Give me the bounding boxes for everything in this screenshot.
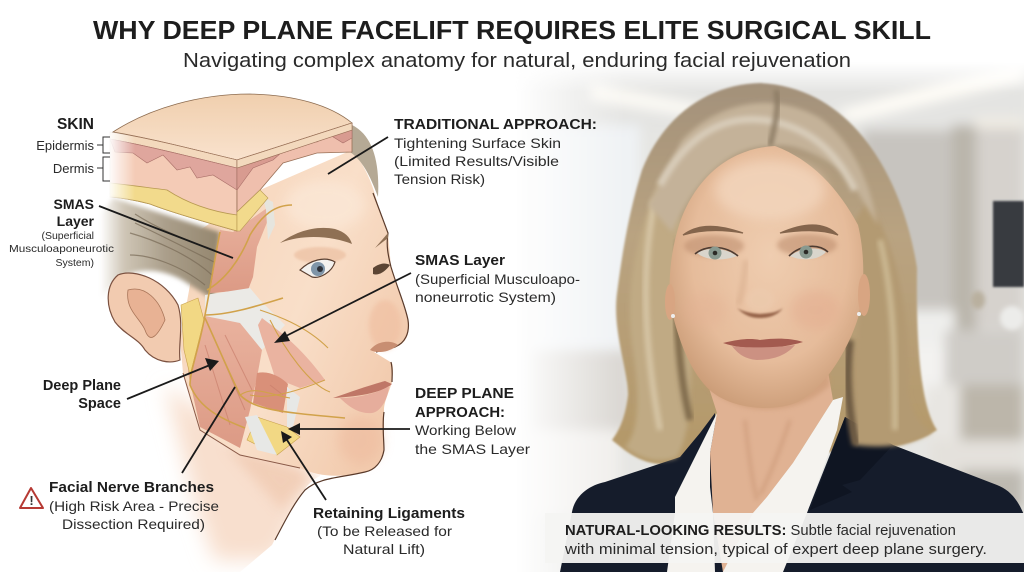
arrow: facial nerve branches <box>182 387 235 473</box>
label: deep plane space: Deep Plane <box>43 378 121 394</box>
cheek warmth <box>790 290 840 330</box>
skin cross-section flap <box>110 94 352 231</box>
label: facial nerve branches: (High Risk Area - Precise <box>49 498 219 514</box>
warning icon <box>20 488 43 508</box>
neck <box>165 385 320 560</box>
arrow: deep plane approach <box>288 423 410 435</box>
label: deep plane approach: APPROACH: <box>415 405 505 421</box>
label: deep plane space: Space <box>78 396 121 412</box>
label: SMAS layer left: System) <box>55 257 94 269</box>
label: deep plane approach: DEEP PLANE <box>415 386 514 402</box>
label: SMAS layer left: (Superficial <box>41 230 94 242</box>
caption banner <box>545 513 1024 563</box>
face skin <box>180 150 409 476</box>
white shirt <box>667 397 843 572</box>
label: skin layers with brackets: Epidermis <box>36 138 94 153</box>
brows <box>683 225 838 235</box>
label: SMAS layer right: SMAS Layer <box>415 253 505 269</box>
label: traditional approach: (Limited Results/Visible <box>394 153 559 169</box>
facial nerve branches <box>190 205 345 428</box>
label: deep plane approach: the SMAS Layer <box>415 441 530 457</box>
label: retaining ligaments: Retaining Ligaments <box>313 506 465 522</box>
label: SMAS layer right: noneurrotic System) <box>415 289 556 305</box>
label: traditional approach: Tightening Surface Skin <box>394 135 561 151</box>
clinic interior background <box>536 70 1024 572</box>
anatomical head illustration <box>100 94 409 560</box>
jacket <box>560 413 1024 572</box>
nose <box>737 260 783 318</box>
arrow: retaining ligaments <box>281 431 326 500</box>
label: SMAS layer left: SMAS <box>54 196 94 212</box>
warning icon: ! <box>29 493 34 508</box>
label: deep plane approach: Working Below <box>415 422 517 438</box>
label: SMAS layer left <box>9 196 114 269</box>
label: retaining ligaments <box>313 506 465 557</box>
caption banner: with minimal tension, typical of expert deep plane surgery. <box>564 542 987 558</box>
eyes <box>697 249 826 259</box>
label: retaining ligaments: (To be Released for <box>317 523 452 539</box>
label: facial nerve branches <box>49 480 219 532</box>
title: WHY DEEP PLANE FACELIFT REQUIRES ELITE SURGICAL SKILL <box>93 15 931 45</box>
face <box>670 146 863 408</box>
arrow: SMAS layer left <box>99 206 233 258</box>
label: traditional approach: Tension Risk) <box>394 171 485 187</box>
arrow: SMAS layer right <box>274 273 411 343</box>
label: traditional approach: TRADITIONAL APPROACH: <box>394 117 597 133</box>
hair strands and face <box>625 90 932 460</box>
label: retaining ligaments: Natural Lift) <box>343 541 425 557</box>
forehead highlight and cheek shading <box>285 180 365 230</box>
exposed SMAS and muscle <box>181 197 325 468</box>
label: facial nerve branches: Facial Nerve Branches <box>49 480 214 496</box>
label: SMAS layer left: Layer <box>57 213 95 229</box>
eye sockets <box>684 235 744 257</box>
label: skin layers with brackets <box>36 116 110 181</box>
label: SMAS layer left: Musculoaponeurotic <box>9 243 114 255</box>
facial features <box>280 228 398 413</box>
ear <box>108 273 181 362</box>
label: SMAS layer right <box>415 253 580 305</box>
label: skin layers with brackets: SKIN <box>57 116 94 133</box>
label: traditional approach <box>394 117 597 187</box>
photo: woman in clinic interior <box>536 70 1024 572</box>
subtitle: Navigating complex anatomy for natural, enduring facial rejuvenation <box>183 50 851 72</box>
label: skin layers with brackets: Dermis <box>53 161 94 176</box>
neck and chest <box>700 360 833 572</box>
ears and earrings <box>665 284 675 320</box>
profile outline <box>275 193 408 540</box>
label: deep plane space <box>43 378 121 412</box>
label: SMAS layer right: (Superficial Musculoapo- <box>415 271 580 287</box>
label: deep plane approach <box>415 386 530 457</box>
arrow: deep plane space <box>127 358 219 399</box>
hair <box>100 125 378 300</box>
hair back <box>612 83 937 464</box>
caption banner: NATURAL-LOOKING RESULTS: Subtle facial rejuvenation <box>565 523 956 539</box>
lips <box>723 339 803 348</box>
label: facial nerve branches: Dissection Required) <box>62 516 205 532</box>
arrow: traditional approach <box>328 137 388 174</box>
